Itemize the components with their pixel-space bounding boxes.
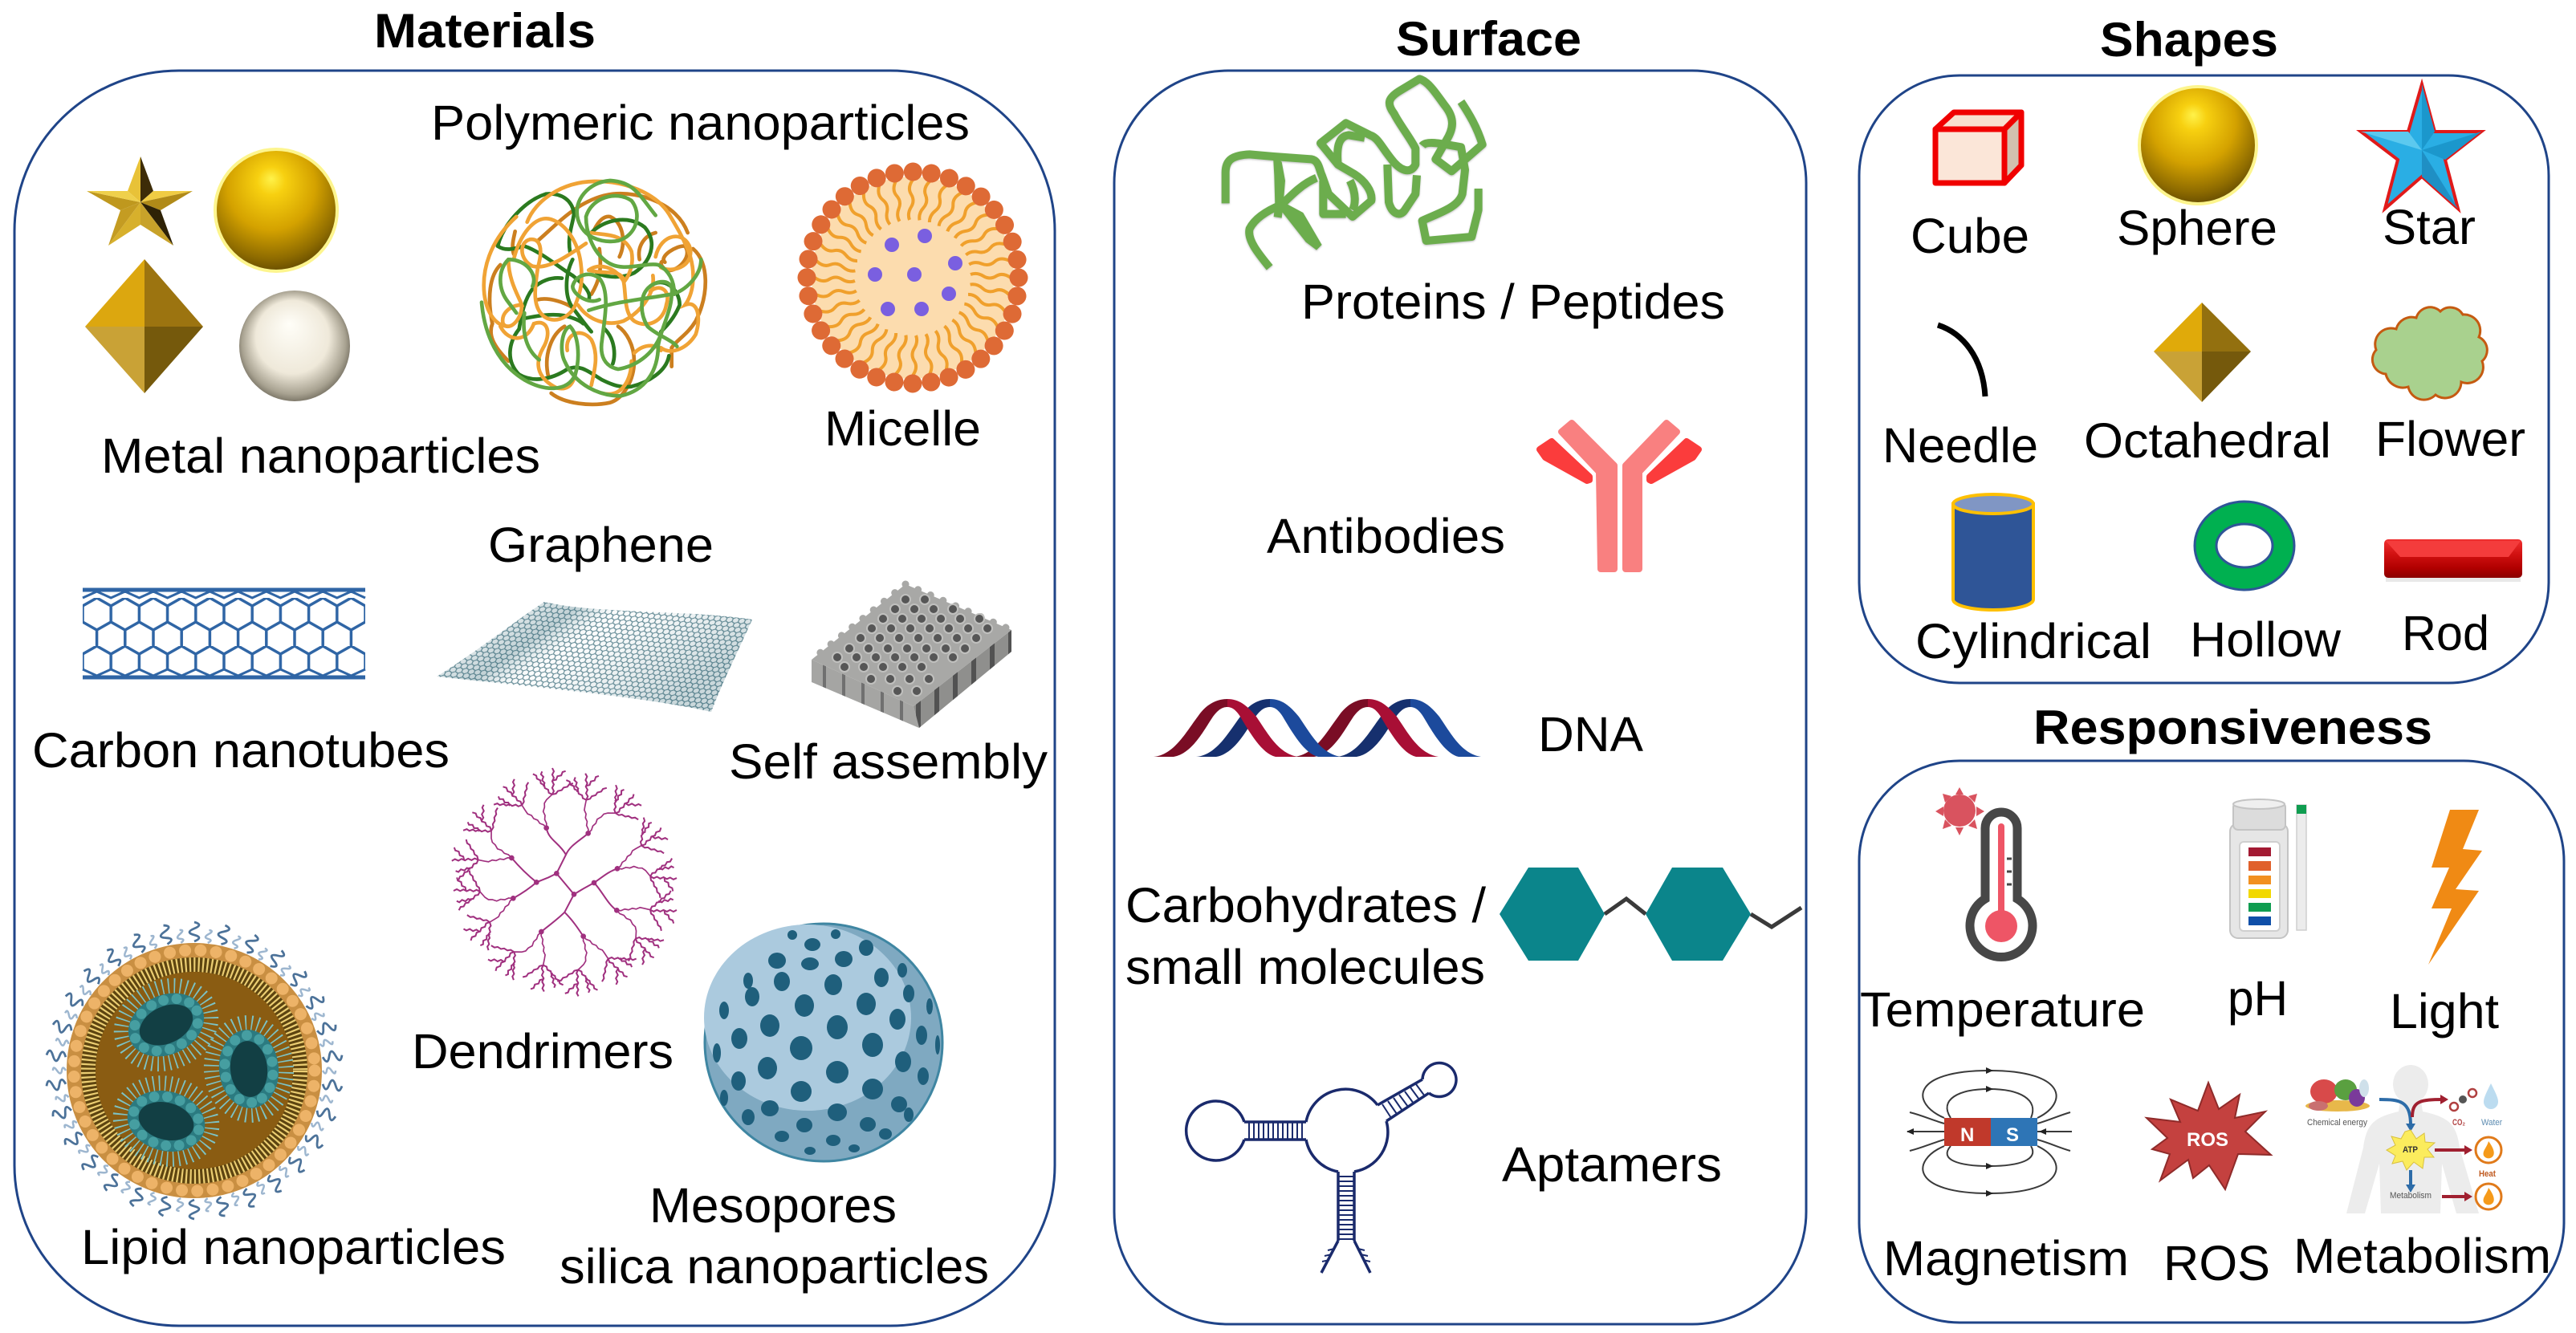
label: Micelle: Micelle — [824, 401, 981, 456]
heat symbols — [2476, 1137, 2501, 1209]
label: Octahedral: Octahedral — [2084, 413, 2331, 468]
label: Mesopores silica nanoparticles: Mesopores — [649, 1178, 897, 1233]
metabolism arrows — [2379, 1099, 2466, 1197]
label: DNA: DNA — [1538, 707, 1643, 762]
label: Antibodies: Antibodies — [1267, 509, 1505, 563]
panel: Shapes — [1859, 75, 2549, 683]
icon: hollow ring — [2195, 502, 2294, 590]
icon: flower — [2372, 307, 2487, 400]
label: Sphere: Sphere — [2117, 201, 2277, 255]
PEG chains — [46, 922, 343, 1219]
metabolism small labels: Metabolism — [2390, 1191, 2432, 1201]
label: Cylindrical: Cylindrical — [1915, 614, 2151, 669]
label: Light: Light — [2390, 984, 2499, 1038]
icon: sphere — [2139, 87, 2257, 204]
heading: Shapes: Shapes — [2100, 13, 2278, 67]
icon: octahedral — [2154, 303, 2251, 402]
icon: graphene sheet — [437, 602, 752, 712]
icon: antibody — [1540, 423, 1699, 569]
metabolism small labels: ATP — [2403, 1145, 2418, 1155]
label: Carbon nanotubes: Carbon nanotubes — [32, 723, 450, 778]
label: Carbohydrates / small molecules: Carbohydrates / — [1125, 878, 1486, 933]
icon: star — [2361, 84, 2481, 209]
label: Rod: Rod — [2402, 606, 2489, 660]
icon: bar magnet with field lines: S — [2006, 1124, 2019, 1146]
heading: Responsiveness: Responsiveness — [2033, 701, 2432, 754]
label: Mesopores silica nanoparticles — [560, 1178, 989, 1294]
label: Mesopores silica nanoparticles: silica nanoparticles — [560, 1239, 989, 1294]
icon: rod — [2384, 539, 2522, 582]
icon: metal nanoparticles — [85, 149, 350, 401]
body silhouette — [2346, 1065, 2479, 1213]
panel: Surface — [1114, 71, 1806, 1324]
label: Carbohydrates / small molecules — [1125, 878, 1486, 994]
icon: cylinder — [1953, 494, 2033, 610]
label: Metabolism: Metabolism — [2293, 1229, 2551, 1283]
icon: bar magnet with field lines: N — [1960, 1124, 1974, 1146]
panel: Materials — [14, 71, 1055, 1326]
label: Graphene: Graphene — [488, 518, 714, 572]
label: Flower: Flower — [2375, 412, 2525, 466]
label: pH: pH — [2228, 971, 2288, 1026]
metabolism small labels: Chemical energy — [2307, 1118, 2367, 1128]
icon: carbohydrate chain — [1500, 868, 1801, 961]
icon: polymeric nanoparticle tangle — [482, 181, 706, 404]
heading: Materials: Materials — [374, 4, 596, 58]
ATP burst — [2387, 1130, 2435, 1170]
icon: gold star — [87, 156, 193, 246]
label: Dendrimers: Dendrimers — [412, 1024, 674, 1079]
label: Hollow: Hollow — [2190, 612, 2342, 667]
icon: silver sphere — [239, 291, 350, 401]
label: Cube: Cube — [1911, 209, 2029, 263]
icon: cube — [1935, 112, 2021, 183]
icon: gold sphere — [215, 149, 337, 271]
icon: lightning bolt — [2428, 810, 2482, 965]
icon: metabolism diagram — [2305, 1065, 2502, 1213]
lipid inner micelles — [112, 974, 288, 1167]
icon: DNA double helix — [1154, 699, 1481, 757]
metabolism small labels: Heat — [2479, 1169, 2496, 1179]
label: Carbohydrates / small molecules: small molecules — [1125, 940, 1485, 994]
label: ROS: ROS — [2163, 1236, 2270, 1290]
icon: gold octahedron — [85, 259, 203, 393]
metabolism small labels — [2307, 1118, 2502, 1201]
label: Lipid nanoparticles: Lipid nanoparticles — [81, 1220, 506, 1274]
icon: sun — [1935, 787, 1984, 835]
icon: dendrimer — [435, 754, 694, 1011]
icon: bar magnet with field lines — [1907, 1067, 2072, 1197]
metabolism small labels: CO₂ — [2452, 1118, 2465, 1128]
icon: micelle — [807, 172, 1019, 384]
icon: self assembly block — [812, 584, 1011, 728]
icon: ROS burst: ROS — [2187, 1129, 2228, 1151]
icon: protein strands — [1226, 79, 1483, 267]
panel: Responsiveness — [1859, 761, 2564, 1323]
food — [2305, 1079, 2370, 1112]
icon: lipid nanoparticle — [46, 922, 343, 1219]
label: Polymeric nanoparticles: Polymeric nanoparticles — [431, 96, 970, 150]
icon: carbon nanotube — [83, 590, 365, 677]
icon: aptamer — [1186, 1063, 1456, 1273]
icon: ROS burst — [2147, 1083, 2271, 1189]
label: Self assembly: Self assembly — [729, 734, 1048, 789]
label: Proteins / Peptides: Proteins / Peptides — [1301, 274, 1725, 329]
CO2 and water — [2450, 1083, 2498, 1111]
label: Magnetism: Magnetism — [1883, 1231, 2129, 1286]
label: Needle: Needle — [1882, 418, 2038, 473]
label: Aptamers: Aptamers — [1502, 1137, 1722, 1192]
label: Star: Star — [2383, 200, 2476, 254]
icon: mesoporous silica sphere — [704, 924, 942, 1161]
heading: Surface: Surface — [1396, 12, 1581, 66]
metabolism small labels: Water — [2481, 1118, 2502, 1128]
label: Metal nanoparticles: Metal nanoparticles — [101, 429, 540, 483]
label: Temperature: Temperature — [1860, 982, 2145, 1037]
icon: needle — [1938, 325, 1985, 396]
icon: thermometer with sun — [1935, 787, 2033, 957]
icon: pH test bottle and strip — [2230, 799, 2306, 938]
